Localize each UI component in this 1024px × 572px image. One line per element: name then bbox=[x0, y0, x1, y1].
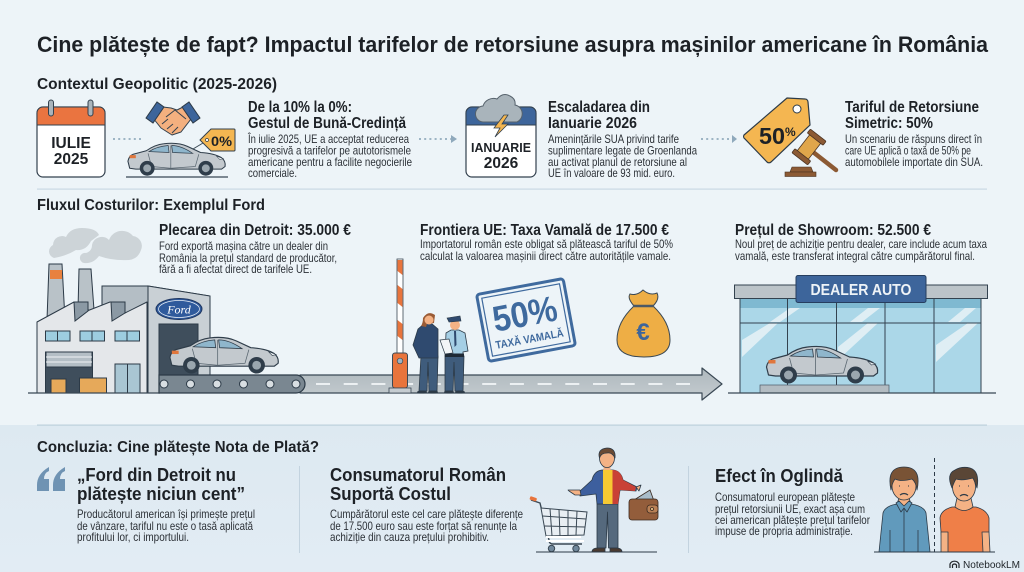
icon: Ford logo: Ford bbox=[166, 302, 192, 316]
text block: escalation: Ianuarie 2026 bbox=[548, 115, 637, 132]
text block: Ford pays nothing: profitului lor, ci importului. bbox=[77, 530, 189, 544]
text block: symmetric tariff bbox=[845, 99, 983, 169]
icon: 50 percent tag with gavel: % bbox=[785, 125, 796, 139]
stamp: 50 percent customs duty bbox=[477, 279, 575, 361]
icon: calendar July 2025: 2025 bbox=[54, 151, 89, 168]
arrow: road to showroom bbox=[300, 368, 722, 400]
icon: car leaving factory bbox=[170, 337, 278, 374]
text block: Romanian consumer: Cumpărătorul este cel care plătește diferențe bbox=[330, 507, 523, 521]
text block: showroom price: Prețul de Showroom: 52.500 € bbox=[735, 222, 931, 239]
text block: departure from Detroit bbox=[159, 222, 351, 276]
text block: from 10 to 0 percent: progresivă a tarifelor pe autotorismele bbox=[248, 144, 411, 158]
heading: conclusion: Concluzia: Cine plătește Nota de Plată? bbox=[37, 439, 319, 456]
text block: from 10 to 0 percent: În iulie 2025, UE a acceptat reducerea bbox=[247, 131, 409, 146]
icon: car dealership: DEALER AUTO bbox=[810, 282, 912, 299]
text block: from 10 to 0 percent: Gestul de Bună-Credință bbox=[248, 115, 406, 132]
text block: showroom price bbox=[735, 222, 987, 263]
text block: from 10 to 0 percent bbox=[247, 99, 412, 180]
icon: 50 percent tag with gavel: 50 bbox=[759, 123, 785, 149]
text block: EU border: Importatorul român este obligat să plătească tariful de 50% bbox=[420, 237, 673, 251]
text block: Ford pays nothing: plătește niciun cent” bbox=[77, 483, 245, 504]
icon: handshake bbox=[146, 102, 200, 135]
text block: from 10 to 0 percent: De la 10% la 0%: bbox=[248, 99, 352, 116]
stamp: 50 percent customs duty: 50% bbox=[489, 288, 561, 340]
title: Cine plătește de fapt? Impactul tarifelor de retorsiune asupra mașinilor americane în România bbox=[37, 32, 989, 57]
text block: departure from Detroit: Ford exportă mașina către un dealer din bbox=[159, 239, 328, 253]
icon: border barrier bbox=[389, 259, 411, 393]
icon: consumer with Romanian colors bbox=[568, 448, 641, 552]
icon: euro money bag: € bbox=[636, 319, 650, 346]
icon: calendar January 2026 with storm bbox=[466, 95, 536, 177]
icon: 50 percent tag with gavel bbox=[744, 98, 836, 176]
icon: calendar July 2025 bbox=[37, 100, 105, 177]
text block: Romanian consumer: achiziție din cauza prețului prohibitiv. bbox=[330, 530, 489, 544]
text block: Ford pays nothing bbox=[77, 464, 255, 544]
text block: mirror effect: prețul retorsiunii UE, exact așa cum bbox=[715, 502, 865, 516]
text block: symmetric tariff: care UE aplică o taxă de 50% pe bbox=[845, 144, 971, 158]
text block: mirror effect: Consumatorul european plătește bbox=[715, 490, 855, 504]
text block: Romanian consumer: Consumatorul Român bbox=[330, 464, 506, 485]
text block: departure from Detroit: fără a fi afectat direct de tarifele UE. bbox=[159, 262, 312, 276]
text block: mirror effect: Efect în Oglindă bbox=[715, 465, 844, 486]
icon: shopping cart bbox=[529, 496, 587, 552]
logo: NotebookLM: NotebookLM bbox=[963, 560, 1020, 571]
icon: calendar July 2025: IULIE bbox=[51, 135, 91, 152]
icon: customs officers bbox=[413, 313, 468, 394]
text block: from 10 to 0 percent: americane pentru a facilite negocierile bbox=[248, 155, 412, 169]
icon: car with 0 percent tag: 0% bbox=[211, 133, 233, 149]
text block: EU border: calculat la valoarea mașinii direct către autoritățile vamale. bbox=[420, 249, 671, 263]
icon: car with 0 percent tag bbox=[126, 129, 235, 177]
arrow: dotted connector 1 bbox=[113, 138, 144, 140]
text block: escalation: Escaladarea din bbox=[548, 99, 650, 116]
icon: car dealership bbox=[728, 276, 996, 393]
text block: Ford pays nothing: „Ford din Detroit nu bbox=[77, 464, 236, 485]
icon: conveyor belt bbox=[159, 375, 305, 393]
text block: mirror effect: impuse de propria administrație. bbox=[715, 524, 853, 538]
text block: escalation: suplimentare legate de Groenlanda bbox=[548, 144, 697, 158]
stamp: 50 percent customs duty: TAXĂ VAMALĂ bbox=[494, 326, 565, 352]
icon: showroom car bbox=[766, 346, 878, 384]
text block: departure from Detroit: România la prețul standard de producător, bbox=[159, 251, 337, 265]
text block: Ford pays nothing: Producătorul american își primește prețul bbox=[77, 507, 255, 521]
icon: quotation mark bbox=[37, 467, 65, 491]
text block: escalation: UE în valoare de 93 mid. euro. bbox=[548, 166, 675, 180]
text block: showroom price: vamală, este transferat integral către cumpărătorul final. bbox=[735, 249, 975, 263]
text block: escalation bbox=[548, 99, 697, 180]
text block: mirror effect: cei american plătește prețul tarifelor bbox=[715, 513, 870, 527]
text block: EU border: Frontiera UE: Taxa Vamală de 17.500 € bbox=[420, 222, 669, 239]
icon: calendar January 2026 with storm: IANUARIE bbox=[471, 140, 531, 155]
arrow: dotted connector 3 bbox=[701, 135, 737, 143]
text block: Ford pays nothing: de vânzare, tariful nu este o tasă aplicată bbox=[77, 519, 253, 533]
panel: conclusion background bbox=[0, 425, 1024, 572]
icon: mirrored people bbox=[874, 458, 995, 552]
text block: Romanian consumer bbox=[330, 464, 523, 544]
icon: calendar January 2026 with storm: 2026 bbox=[484, 155, 519, 172]
text block: mirror effect bbox=[715, 465, 870, 538]
text block: escalation: Amenințările SUA privind tarife bbox=[548, 132, 679, 146]
icon: wallet bbox=[629, 490, 658, 520]
text block: departure from Detroit: Plecarea din Detroit: 35.000 € bbox=[159, 222, 351, 239]
text block: from 10 to 0 percent: comerciale. bbox=[248, 166, 297, 180]
text block: Romanian consumer: Suportă Costul bbox=[330, 483, 451, 504]
text block: escalation: au activat planul de retorsiune al bbox=[548, 155, 687, 169]
heading: geopolitical context: Contextul Geopolitic (2025-2026) bbox=[37, 76, 277, 93]
icon: euro money bag bbox=[617, 290, 670, 357]
text block: EU border bbox=[420, 222, 673, 263]
heading: cost flow: Fluxul Costurilor: Exemplul Ford bbox=[37, 197, 265, 214]
text block: Romanian consumer: de 17.500 euro sau este forțat să renunțe la bbox=[330, 519, 517, 533]
arrow: dotted connector 2 bbox=[419, 135, 457, 143]
text block: symmetric tariff: Un scenariu de răspuns direct în bbox=[845, 132, 982, 146]
icon: Ford logo bbox=[156, 298, 202, 320]
icon: factory bbox=[28, 228, 210, 393]
text block: symmetric tariff: Tariful de Retorsiune bbox=[845, 99, 979, 116]
text block: symmetric tariff: automobilele importate din SUA. bbox=[845, 155, 983, 169]
text block: symmetric tariff: Simetric: 50% bbox=[845, 115, 933, 132]
